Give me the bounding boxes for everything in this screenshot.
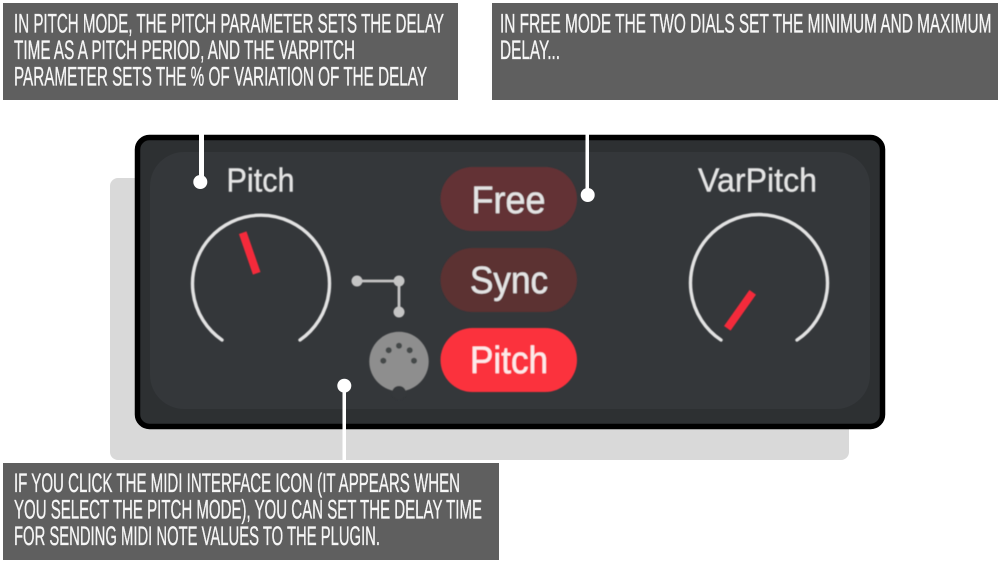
varpitch dial: VarPitch: [698, 162, 817, 198]
routing icon: [352, 276, 404, 318]
callout: free mode: DELAY...: [500, 35, 560, 65]
callout: pitch mode: [3, 3, 458, 100]
leader line: free button: [581, 100, 595, 202]
icon: MIDI connector: [369, 332, 429, 400]
callout: MIDI interface: YOU SELECT THE PITCH MODE), YOU CAN SET THE DELAY TIME: [14, 494, 482, 524]
button: Pitch (selected): [440, 328, 577, 392]
callout: MIDI interface: FOR SENDING MIDI NOTE VALUES TO THE PLUGIN.: [14, 521, 380, 551]
button: Pitch (selected): Pitch: [470, 340, 548, 382]
leader line: pitch dial: [193, 100, 207, 189]
callout: pitch mode: TIME AS A PITCH PERIOD, AND THE VARPITCH: [14, 35, 355, 65]
button: Free: Free: [472, 180, 546, 222]
panel drop shadow: [110, 178, 849, 460]
pitch dial: [192, 162, 330, 340]
varpitch dial: [690, 162, 828, 340]
callout: pitch mode: PARAMETER SETS THE % OF VARIATION OF THE DELAY: [14, 62, 427, 92]
callout: MIDI interface: IF YOU CLICK THE MIDI INTERFACE ICON (IT APPEARS WHEN: [14, 468, 460, 498]
callout: pitch mode: IN PITCH MODE, THE PITCH PARAMETER SETS THE DELAY: [14, 8, 444, 38]
button: Sync: Sync: [470, 260, 548, 302]
leader line: MIDI icon: [337, 379, 351, 464]
button: Sync: [440, 248, 577, 312]
button: Free: [440, 167, 577, 231]
callout: MIDI interface: [3, 463, 499, 560]
pitch dial: Pitch: [226, 162, 294, 198]
plugin panel: [138, 138, 882, 426]
callout: free mode: [492, 3, 998, 100]
